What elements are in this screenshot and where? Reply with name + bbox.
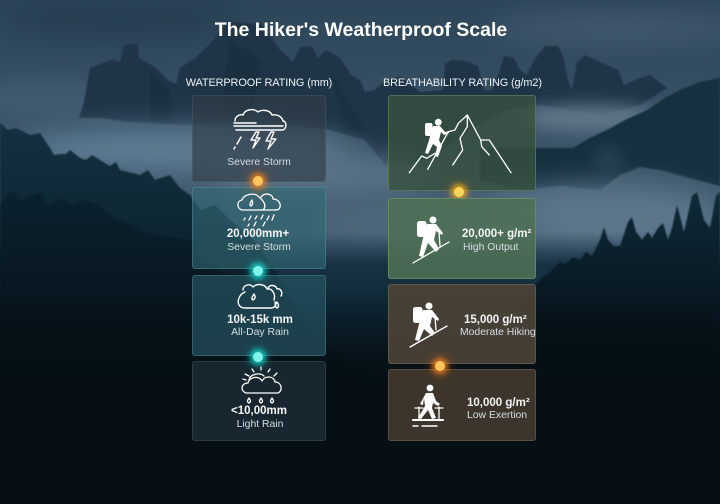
panel: under 10,00mm xyxy=(192,361,326,441)
left forest xyxy=(0,123,360,504)
value: 15,000 g/m2: 15,000 g/m² xyxy=(464,314,527,326)
heading: waterproof rating: WATERPROOF RATING (mm) xyxy=(186,77,332,89)
dark floor xyxy=(0,290,720,504)
right foreground trees xyxy=(520,192,720,504)
dot: orange connector left xyxy=(253,176,263,186)
lower fog xyxy=(475,184,720,252)
icon: walker on boardwalk xyxy=(412,384,444,427)
right ridge xyxy=(480,78,720,190)
label: severe storm: Severe Storm xyxy=(227,157,291,168)
icon: cloud with drops xyxy=(238,284,282,309)
panel: severe storm xyxy=(192,95,326,182)
value: 20,000+ g/m2: 20,000+ g/m² xyxy=(462,228,531,240)
icon: sun, cloud and rain xyxy=(241,366,282,404)
dot: teal connector lower xyxy=(253,352,263,362)
fog layer xyxy=(10,128,350,172)
icon: hiker climbing mountain xyxy=(408,114,512,174)
label: moderate hiking: Moderate Hiking xyxy=(460,327,536,338)
label: severe storm: Severe Storm xyxy=(227,242,291,253)
label: low exertion: Low Exertion xyxy=(467,410,527,421)
value: under 10,00mm: <10,00mm xyxy=(231,405,287,417)
title: The Hiker's Weatherproof Scale xyxy=(215,19,507,41)
label: high output: High Output xyxy=(463,242,518,253)
value: 20,000mm+: 20,000mm+ xyxy=(227,228,289,240)
dot: yellow connector xyxy=(454,187,464,197)
panel: 20,000+ g/m2 xyxy=(388,198,536,279)
panel: 10k-15k mm xyxy=(192,275,326,356)
icon: hiker on slope xyxy=(409,302,448,348)
panel: mountain climber xyxy=(388,95,536,191)
icon: storm cloud with lightning xyxy=(233,108,287,150)
dot: orange connector right xyxy=(435,361,445,371)
panel: 10,000 g/m2 xyxy=(388,369,536,441)
icon: rain cloud xyxy=(237,193,281,227)
label: light rain: Light Rain xyxy=(237,419,283,430)
mountains xyxy=(79,22,667,165)
heading: breathability rating: BREATHABILITY RATING (g/m2) xyxy=(383,77,542,89)
dot: teal connector upper xyxy=(253,266,263,276)
label: all-day rain: All-Day Rain xyxy=(231,327,289,338)
lower valley xyxy=(0,232,720,504)
value: 10,000 g/m2: 10,000 g/m² xyxy=(467,397,530,409)
panel: 20,000mm+ xyxy=(192,187,326,269)
panel: 15,000 g/m2 xyxy=(388,284,536,364)
icon: hiker on slope xyxy=(412,216,450,264)
value: 10k-15k mm: 10k-15k mm xyxy=(227,314,293,326)
